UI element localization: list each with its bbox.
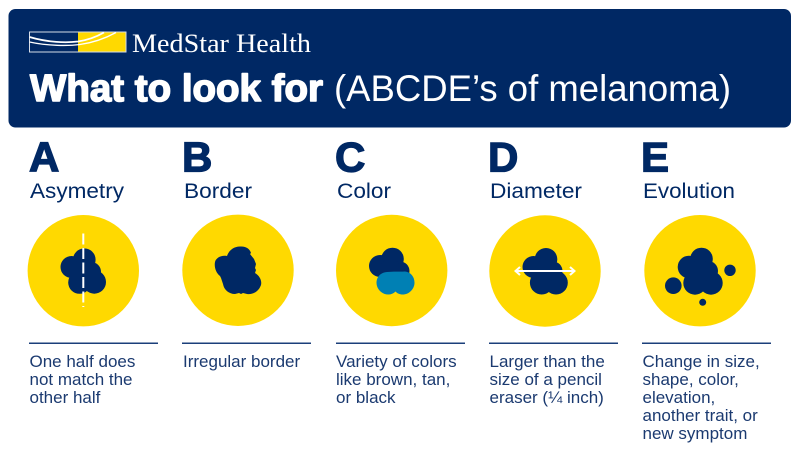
letter D: D <box>488 134 518 180</box>
title subtitle: (ABCDE’s of melanoma) <box>334 68 731 109</box>
description: Variety of colors <box>336 352 457 371</box>
description: One half does <box>30 352 135 371</box>
description: Larger than the <box>490 352 605 371</box>
icon: two-coloured mole <box>336 215 447 326</box>
icon: mole with irregular border <box>182 215 294 326</box>
description: like brown, tan, <box>336 370 450 389</box>
description: or black <box>336 388 396 407</box>
description: other half <box>30 388 101 407</box>
letter C: C <box>335 134 365 180</box>
description: elevation, <box>642 388 715 407</box>
header panel <box>8 9 791 128</box>
divider <box>182 342 311 344</box>
label Evolution: Evolution <box>643 180 735 203</box>
description: new symptom <box>642 424 747 443</box>
column C: Color <box>335 134 465 407</box>
divider <box>336 342 465 344</box>
divider <box>642 342 771 344</box>
letter A: A <box>29 134 59 180</box>
letter E: E <box>641 134 669 180</box>
column D: Diameter <box>488 134 618 407</box>
description: size of a pencil <box>490 370 602 389</box>
column A: Asymetry <box>28 134 158 407</box>
divider <box>489 342 618 344</box>
icon: evolving mole with satellites <box>644 215 756 326</box>
description: Irregular border <box>183 352 301 371</box>
icon: mole with diameter arrow <box>489 215 601 327</box>
teal lower half <box>376 272 414 294</box>
column E: Evolution <box>641 134 771 443</box>
description: not match the <box>30 370 133 389</box>
logo: MedStar Health <box>30 29 311 58</box>
title: What to look for <box>30 68 323 110</box>
description: eraser (¼ inch) <box>490 388 604 407</box>
column B: Border <box>182 134 311 371</box>
description: another trait, or <box>642 406 758 425</box>
icon: asymmetric mole with dashed axis <box>28 215 139 326</box>
label Diameter: Diameter <box>490 180 582 203</box>
letter B: B <box>182 134 212 180</box>
divider <box>29 342 158 344</box>
label Color: Color <box>337 180 391 203</box>
label Border: Border <box>184 180 252 203</box>
description: Change in size, <box>642 352 760 371</box>
description: shape, color, <box>642 370 739 389</box>
label Asymetry: Asymetry <box>30 180 125 203</box>
logo: MedStar Health: MedStar Health <box>132 29 311 58</box>
